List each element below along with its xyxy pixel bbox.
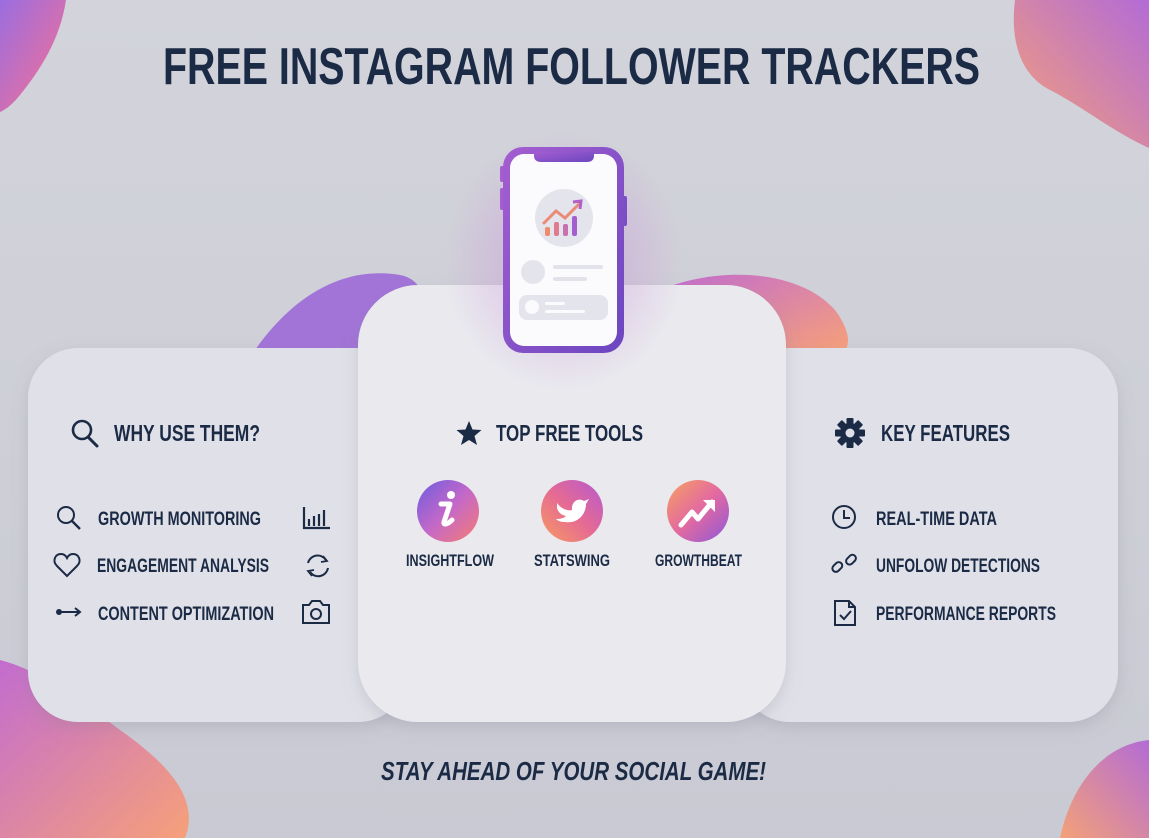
blob: behind panels left (255, 273, 426, 350)
item: growth monitoring: GROWTH MONITORING (98, 509, 261, 530)
panel: top free tools (358, 130, 786, 722)
panel: why use them (28, 348, 408, 722)
icon: phone (500, 147, 627, 353)
blob: bottom right (1060, 740, 1149, 838)
panel: key features (740, 348, 1118, 722)
item: real-time data (833, 506, 997, 530)
heading: key features: KEY FEATURES (881, 420, 1010, 446)
item: performance reports: PERFORMANCE REPORTS (876, 604, 1056, 625)
item: engagement analysis: ENGAGEMENT ANALYSIS (97, 556, 269, 577)
heading: key features (835, 418, 1010, 448)
heading: why use them: WHY USE THEM? (114, 420, 260, 446)
item: unfollow detections: UNFOLOW DETECTIONS (876, 556, 1040, 577)
tool: insightflow: INSIGHTFLOW (406, 551, 495, 570)
blob: top left (0, 0, 66, 112)
heading: top free tools (456, 420, 643, 446)
tool: statswing (534, 480, 610, 570)
tool: growthbeat: GROWTHBEAT (655, 551, 742, 570)
tagline: STAY AHEAD OF YOUR SOCIAL GAME! (381, 756, 766, 786)
heading: top free tools: TOP FREE TOOLS (496, 420, 643, 446)
heading: why use them (73, 420, 260, 446)
item: unfollow detections (831, 553, 1040, 577)
item: real-time data: REAL-TIME DATA (876, 509, 997, 530)
tool: insightflow (406, 480, 495, 570)
tool: growthbeat (655, 480, 742, 570)
item: performance reports (835, 601, 1056, 625)
blob: behind panels right (660, 275, 848, 350)
item: content optimization: CONTENT OPTIMIZATION (98, 604, 274, 625)
tool: statswing: STATSWING (534, 551, 610, 570)
blob: top right (1014, 0, 1149, 148)
blob: bottom left (0, 660, 189, 838)
